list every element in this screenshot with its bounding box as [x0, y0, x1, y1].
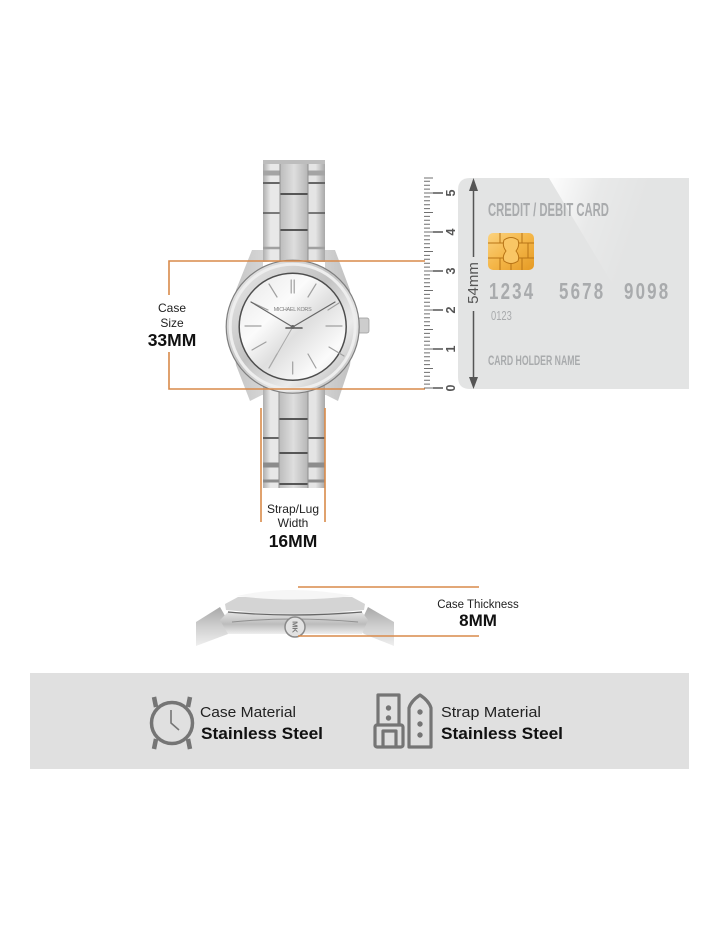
ruler numbers [444, 189, 458, 391]
strap width label: 16MM [269, 531, 317, 551]
strap width label [267, 502, 319, 551]
case thickness label [437, 599, 519, 630]
side lugs and bracelet [196, 607, 232, 646]
card code: 0123 [491, 310, 512, 323]
strap width label: Width [278, 516, 308, 530]
upper bracelet [263, 160, 325, 264]
hands [251, 302, 335, 368]
case thickness label: 8MM [459, 611, 497, 630]
side bezel [225, 597, 365, 614]
case size measure lines [169, 261, 425, 389]
ruler numbers: 0 [444, 384, 458, 391]
strap material text: Strap Material [441, 705, 541, 721]
54mm dimension arrow: 54mm [465, 262, 482, 304]
side crown with logo [285, 617, 305, 637]
case size label: Size [160, 316, 184, 330]
ruler numbers: 5 [444, 189, 458, 196]
card title: CREDIT / DEBIT CARD [488, 200, 609, 221]
case material text [200, 705, 323, 743]
ruler numbers: 4 [444, 228, 458, 235]
lugs [232, 250, 354, 401]
ruler numbers: 2 [444, 306, 458, 313]
icon: strap [375, 695, 431, 747]
case thickness label: Case Thickness [437, 599, 519, 611]
card holder name: CARD HOLDER NAME [488, 354, 581, 369]
ruler numbers: 1 [444, 345, 458, 352]
case material text: Case Material [200, 705, 296, 721]
case size label: 33MM [148, 330, 196, 350]
case size label: Case [158, 301, 186, 315]
hour markers [245, 280, 344, 374]
strap material text: Stainless Steel [441, 724, 563, 743]
case size label [148, 301, 196, 350]
strap width measure lines [261, 408, 325, 522]
watch: front view [226, 160, 369, 488]
materials panel [30, 673, 689, 769]
brand name: MICHAEL KORS [274, 307, 312, 313]
strap material text [441, 705, 563, 743]
watch: side view [196, 590, 394, 646]
credit card: 5678 [559, 278, 605, 305]
side case [220, 612, 368, 634]
side crystal [237, 590, 353, 600]
ruler numbers: 3 [444, 267, 458, 274]
dial [239, 273, 346, 380]
card glare [549, 178, 660, 330]
strap width label: Strap/Lug [267, 502, 319, 516]
icon: watch case [152, 697, 192, 749]
ruler [424, 178, 458, 391]
case thickness measure lines [298, 587, 479, 636]
lower bracelet [263, 385, 325, 488]
case bezel [226, 260, 359, 393]
card number: 1234 [489, 278, 535, 305]
credit card: 9098 [624, 278, 670, 305]
54mm dimension arrow [465, 178, 482, 389]
credit card [458, 178, 689, 389]
crown [358, 318, 369, 333]
side crown with logo: MK [290, 621, 300, 633]
chip [488, 233, 534, 270]
case material text: Stainless Steel [201, 724, 323, 743]
